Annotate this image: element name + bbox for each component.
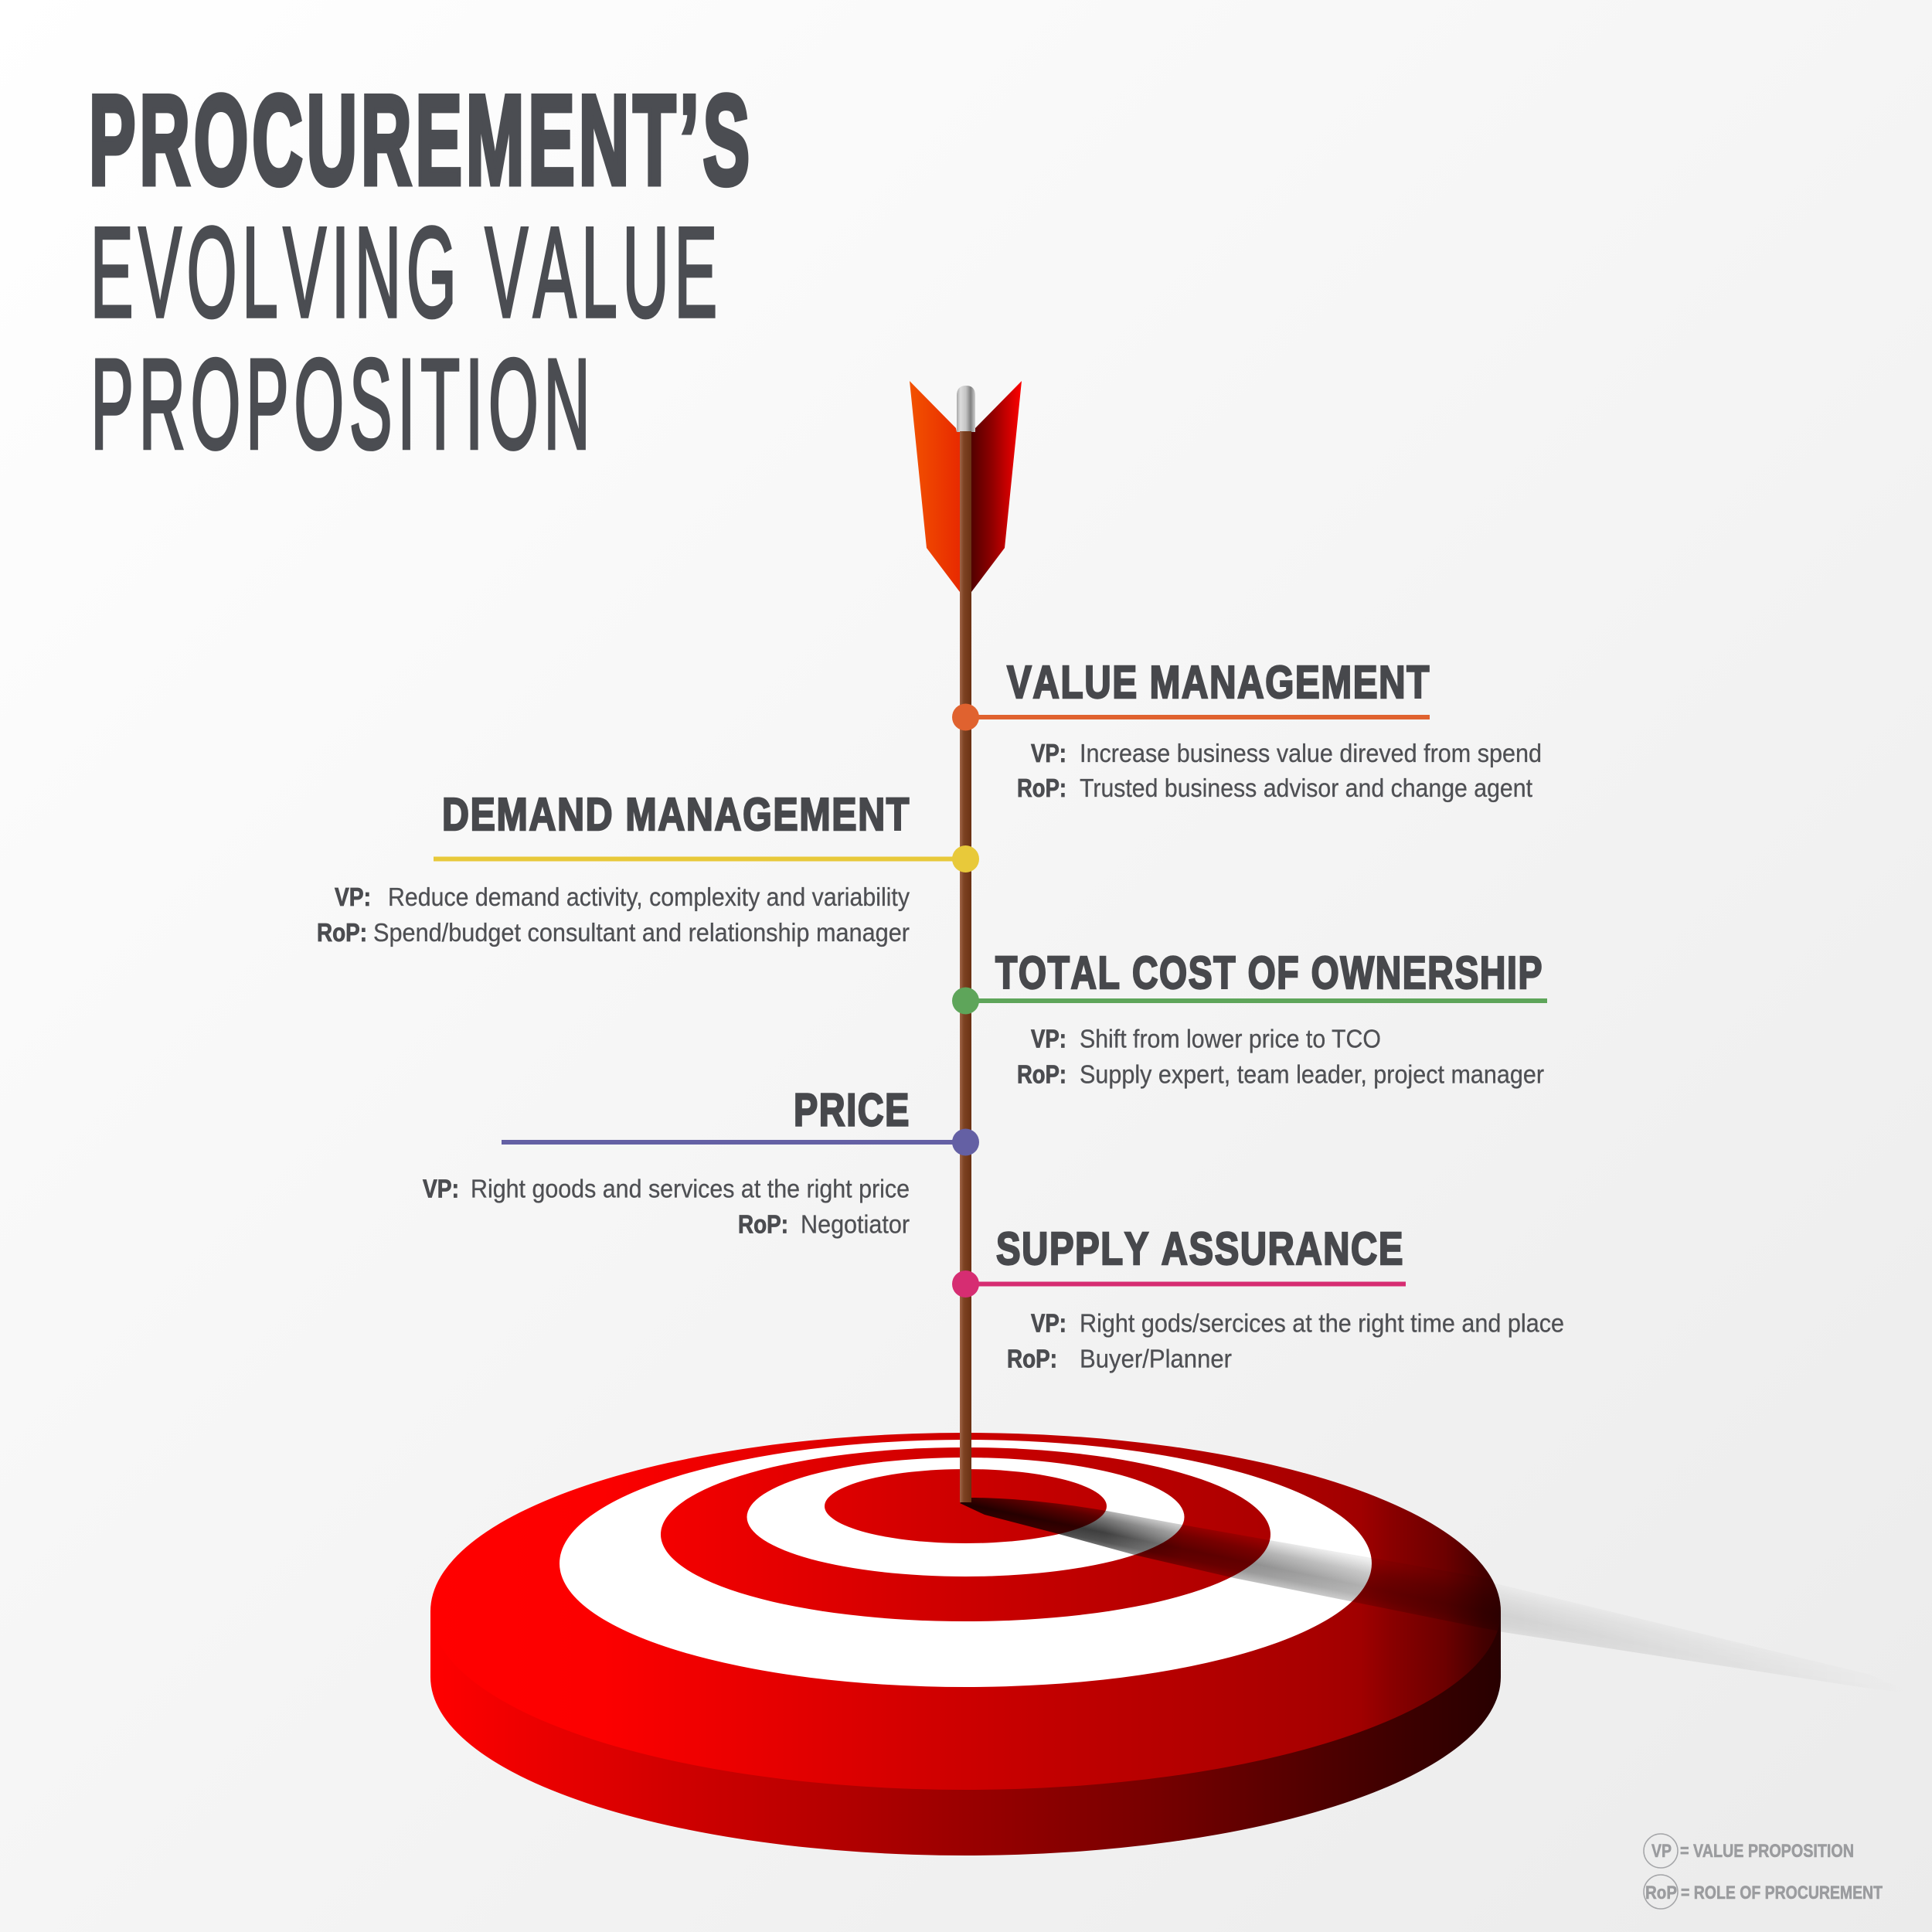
marker dot [952, 845, 979, 872]
marker dot [952, 1270, 979, 1298]
legend: value proposition: = VALUE PROPOSITION [1680, 1841, 1854, 1862]
legend: role of procurement: RoP [1645, 1883, 1677, 1903]
title [89, 69, 753, 476]
target board [430, 1433, 1501, 1855]
heading: TOTAL COST OF OWNERSHIP [995, 947, 1543, 998]
item: total cost of ownership [952, 947, 1547, 1088]
item: demand management [317, 789, 979, 947]
arrow [910, 381, 1022, 1502]
connector line [434, 856, 966, 861]
description: RoP: [317, 918, 367, 947]
arrow shadow on the ground [1496, 1587, 1799, 1677]
arrow shaft [960, 431, 971, 1502]
description: RoP: [1007, 1345, 1057, 1372]
description [317, 883, 910, 947]
inner white ring [747, 1458, 1184, 1577]
description: Supply expert, team leader, project manager [1080, 1060, 1544, 1088]
item: supply assurance [952, 1223, 1564, 1372]
legend: role of procurement [1644, 1875, 1883, 1909]
description: Shift from lower price to TCO [1080, 1025, 1381, 1053]
left fletching [910, 381, 960, 592]
title: PROCUREMENT’S [89, 69, 753, 211]
description: Right goods and services at the right price [471, 1175, 910, 1202]
description: Trusted business advisor and change agent [1080, 774, 1532, 802]
description: VP: [1031, 739, 1066, 767]
legend [1644, 1834, 1883, 1909]
connector line [965, 715, 1430, 719]
description: Negotiator [801, 1210, 910, 1238]
heading: DEMAND MANAGEMENT [442, 789, 910, 840]
description [1017, 739, 1542, 802]
legend: role of procurement: = ROLE OF PROCUREMENT [1681, 1883, 1883, 1903]
description [1007, 1309, 1564, 1372]
item: value management [952, 657, 1542, 802]
heading: SUPPLY ASSURANCE [996, 1223, 1404, 1274]
description: RoP: [1017, 774, 1066, 802]
marker dot [952, 1128, 979, 1156]
title: EVOLVING VALUE [90, 201, 723, 345]
description: RoP: [1017, 1060, 1066, 1088]
description: Spend/budget consultant and relationship manager [373, 918, 910, 947]
legend: value proposition: VP [1651, 1841, 1672, 1862]
connector line [502, 1140, 966, 1145]
middle red ring [661, 1447, 1270, 1621]
connector line [965, 1281, 1406, 1286]
legend: value proposition [1644, 1834, 1854, 1868]
outer white ring [560, 1440, 1372, 1687]
description: VP: [423, 1175, 459, 1202]
description: RoP: [738, 1210, 788, 1238]
arrow nock [957, 386, 975, 432]
target side [430, 1611, 1501, 1855]
description [423, 1175, 910, 1238]
arrow shadow on the target [960, 1498, 1515, 1634]
heading: VALUE MANAGEMENT [1007, 657, 1430, 708]
description: Reduce demand activity, complexity and variability [388, 883, 910, 911]
heading: PRICE [794, 1085, 910, 1136]
target top face [430, 1433, 1501, 1790]
bullseye [825, 1469, 1107, 1543]
marker dot [952, 703, 979, 731]
description: VP: [335, 883, 371, 911]
item: price [423, 1085, 979, 1238]
right fletching [971, 381, 1022, 592]
title: PROPOSITION [91, 333, 595, 476]
description: Increase business value direved from spend [1080, 739, 1542, 767]
description: Buyer/Planner [1080, 1345, 1232, 1372]
description: VP: [1031, 1025, 1066, 1053]
description: VP: [1031, 1309, 1066, 1337]
description: Right gods/sercices at the right time and place [1080, 1309, 1564, 1337]
marker dot [952, 988, 979, 1014]
description [1017, 1025, 1544, 1088]
connector line [965, 998, 1547, 1003]
